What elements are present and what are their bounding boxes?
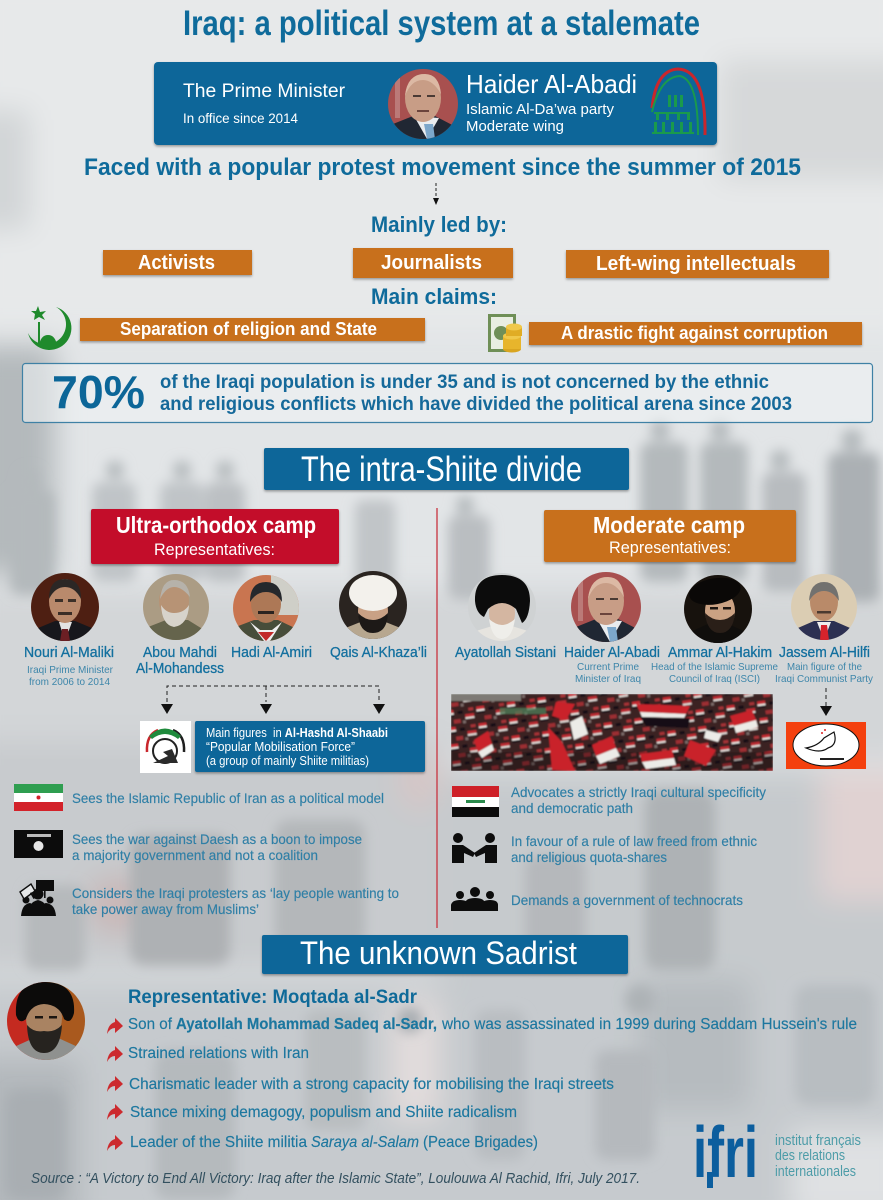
panel: ultra-orthodox camp header xyxy=(91,509,339,564)
box: activists xyxy=(103,250,252,275)
PM name and party: Haider Al-Abadi xyxy=(466,69,637,99)
caption: Maliki role: from 2006 to 2014 xyxy=(29,676,110,688)
PM role text: The Prime Minister xyxy=(183,81,346,102)
box: journalists: Journalists xyxy=(381,252,482,274)
PM role text: In office since 2014 xyxy=(183,111,298,126)
section header: intra-Shiite divide: The intra-Shiite divide xyxy=(301,450,582,489)
names: moderate representatives: Jassem Al-Hilfi xyxy=(779,644,870,661)
text: Iraqi cultural specificity xyxy=(511,784,766,816)
box: left-wing intellectuals: Left-wing intellectuals xyxy=(596,253,796,275)
section header: unknown Sadrist: The unknown Sadrist xyxy=(300,935,577,971)
captions: moderate representatives roles: Iraqi Communist Party xyxy=(775,673,874,685)
box: activists: Activists xyxy=(138,252,215,274)
text: Iran model: Sees the Islamic Republic of Iran as a political model xyxy=(72,790,384,806)
captions: moderate representatives roles: Main figure of the xyxy=(787,661,862,673)
captions: moderate representatives roles: Council of Iraq (ISCI) xyxy=(669,673,760,685)
text: rule of law xyxy=(511,833,757,865)
portrait: Nouri Al-Maliki xyxy=(31,573,99,641)
callout: Hashd al-Shaabi: Main figures in Al-Hashd Al-Shaabi xyxy=(206,725,388,740)
icon: banknotes and coins xyxy=(488,314,522,352)
names: moderate representatives: Ammar Al-Hakim xyxy=(668,644,772,661)
box: separation of religion and state: Separation of religion and State xyxy=(120,318,377,339)
icon: Al-Da'wa party logo xyxy=(652,69,705,135)
bullet item: son of Ayatollah xyxy=(107,1016,857,1034)
panel: moderate camp header xyxy=(544,510,796,562)
text: rule of law: and religious quota-shares xyxy=(511,849,667,865)
captions: moderate representatives roles: Current Prime xyxy=(577,661,639,673)
logo: ifri xyxy=(693,1113,861,1193)
bullet item: charismatic leader: Charismatic leader with a strong capacity for mobilising the Iraqi streets xyxy=(129,1076,614,1093)
portrait: Qais Al-Khaza'li xyxy=(339,571,407,639)
portrait: Ayatollah Sistani xyxy=(468,573,536,641)
heading: main claims: Main claims: xyxy=(371,284,497,309)
statistic description xyxy=(160,371,792,415)
bullet item: Saraya al-Salam: Leader of the Shiite militia xyxy=(130,1134,307,1151)
captions: moderate representatives roles: Head of the Islamic Supreme xyxy=(651,661,778,673)
icon: Iraq flag xyxy=(452,786,499,817)
bullet item: Saraya al-Salam xyxy=(107,1134,538,1151)
title: Iraq: a political system at a stalemate xyxy=(183,4,700,43)
names: ultra-orthodox representatives: Nouri Al-Maliki xyxy=(24,644,114,661)
portrait: Ammar Al-Hakim xyxy=(684,574,752,643)
logo wordmark: internationales xyxy=(775,1163,856,1180)
portrait: Hadi Al-Amiri xyxy=(233,575,301,641)
portrait: Jassem Al-Hilfi xyxy=(791,574,857,640)
bullet item: Saraya al-Salam: (Peace Brigades) xyxy=(423,1134,538,1151)
panel: prime minister xyxy=(154,62,717,145)
heading: protest movement: Faced with a popular protest movement since the summer of 2015 xyxy=(84,154,801,181)
caption: Maliki role xyxy=(27,664,113,688)
bullet item: relations with Iran: Strained relations with Iran xyxy=(128,1045,309,1062)
icon: Iran flag xyxy=(14,784,63,811)
text: war against Daesh xyxy=(72,831,362,863)
bullet item: stance: Stance mixing demagogy, populism and Shiite radicalism xyxy=(130,1104,517,1121)
text: war against Daesh: Sees the war against Daesh as a boon to impose xyxy=(72,831,362,847)
PM name and party: Moderate wing xyxy=(466,118,564,135)
icon: Hashd al-Shaabi logo xyxy=(140,721,191,773)
portrait: Abou Mahdi Al-Mohandess xyxy=(143,574,209,640)
icon: protesters with placards xyxy=(20,880,56,916)
source note: Source : “A Victory to End All Victory: Iraq after the Islamic State”, Loulouwa Al Rachid, Ifri, July 2017. xyxy=(31,1171,640,1187)
list: Sadr characteristics xyxy=(107,1016,857,1151)
image: crowd waving Iraqi flags xyxy=(451,694,773,771)
heading: mainly led by: Mainly led by: xyxy=(371,212,507,237)
portrait: Moqtada al-Sadr xyxy=(7,982,85,1060)
statistic description: and religious conflicts which have divided the political arena since 2003 xyxy=(160,393,792,415)
callout: Hashd al-Shaabi xyxy=(195,721,425,772)
names: moderate representatives: Haider Al-Abadi xyxy=(564,644,660,661)
caption: Maliki role: Iraqi Prime Minister xyxy=(27,664,113,676)
names: ultra-orthodox representatives: Hadi Al-Amiri xyxy=(231,644,312,661)
icon: Iraqi Communist Party logo xyxy=(786,722,866,769)
panel: ultra-orthodox camp header: Ultra-orthodox camp xyxy=(116,512,316,538)
names: moderate representatives: Ayatollah Sistani xyxy=(455,644,556,661)
names: moderate representatives xyxy=(455,644,870,661)
icon: technocrats group xyxy=(451,887,498,911)
callout: 70 percent xyxy=(22,364,872,422)
text: protesters: Considers the Iraqi protesters as ‘lay people wanting to xyxy=(72,885,399,901)
names: ultra-orthodox representatives: Abou Mahdi xyxy=(143,644,217,661)
icon: handshake figures xyxy=(452,833,497,863)
logo: ifri: ifri xyxy=(693,1113,758,1193)
arrows: dashed bracket to Hashd xyxy=(161,686,385,714)
callout: Hashd al-Shaabi: “Popular Mobilisation Force” xyxy=(206,739,355,754)
panel: moderate camp header: Moderate camp xyxy=(593,512,745,538)
icon: crescent and mosque xyxy=(28,306,71,350)
PM role text xyxy=(183,81,346,126)
box: fight against corruption: A drastic fight against corruption xyxy=(561,322,828,343)
text: rule of law: In favour of a rule of law freed from ethnic xyxy=(511,833,757,849)
PM name and party: Islamic Al-Da’wa party xyxy=(466,101,614,118)
text: protesters xyxy=(72,885,399,917)
portrait: Haider Al-Abadi xyxy=(388,69,458,139)
box: left-wing intellectuals xyxy=(566,250,829,278)
icon: Daesh flag xyxy=(14,830,63,858)
logo wordmark xyxy=(775,1132,861,1180)
PM name and party xyxy=(466,69,637,135)
text: Iraqi cultural specificity: and democratic path xyxy=(511,800,633,816)
bullet item: son of Ayatollah: who was assassinated in 1999 during Saddam Hussein's rule xyxy=(441,1016,857,1033)
bullet item: son of Ayatollah: Son of xyxy=(128,1016,173,1033)
divider: camps xyxy=(436,508,438,928)
captions: moderate representatives roles xyxy=(575,661,874,685)
arrow: protest to leaders xyxy=(433,183,439,205)
heading: representative Moqtada al-Sadr: Representative: Moqtada al-Sadr xyxy=(128,986,417,1008)
text: technocrats: Demands a government of technocrats xyxy=(511,892,743,908)
bullet item: son of Ayatollah: Ayatollah Mohammad Sadeq al-Sadr, xyxy=(176,1016,437,1033)
callout: Hashd al-Shaabi: (a group of mainly Shiite militias) xyxy=(206,753,369,768)
arrow: Jassem to Communist Party xyxy=(820,688,832,716)
text: war against Daesh: a majority government and not a coalition xyxy=(72,847,318,863)
logo wordmark: des relations xyxy=(775,1147,845,1164)
names: ultra-orthodox representatives: Qais Al-Khaza’li xyxy=(330,644,427,661)
names: ultra-orthodox representatives xyxy=(24,644,427,677)
bullet item: Saraya al-Salam: Saraya al-Salam xyxy=(311,1134,419,1151)
panel: moderate camp header: Representatives: xyxy=(609,538,731,557)
statistic description: of the Iraqi population is under 35 and is not concerned by the ethnic xyxy=(160,371,769,393)
statistic: 70% xyxy=(52,366,145,418)
panel: ultra-orthodox camp header: Representatives: xyxy=(154,540,275,559)
box: journalists xyxy=(353,248,513,278)
names: ultra-orthodox representatives: Al-Mohandess xyxy=(136,660,224,677)
portrait: Haider Al-Abadi, moderate camp xyxy=(571,572,641,642)
text: protesters: take power away from Muslims’ xyxy=(72,901,259,917)
text: Iraqi cultural specificity: Advocates a strictly Iraqi cultural specificity xyxy=(511,784,766,800)
logo wordmark: institut français xyxy=(775,1132,861,1149)
captions: moderate representatives roles: Minister of Iraq xyxy=(575,673,641,685)
